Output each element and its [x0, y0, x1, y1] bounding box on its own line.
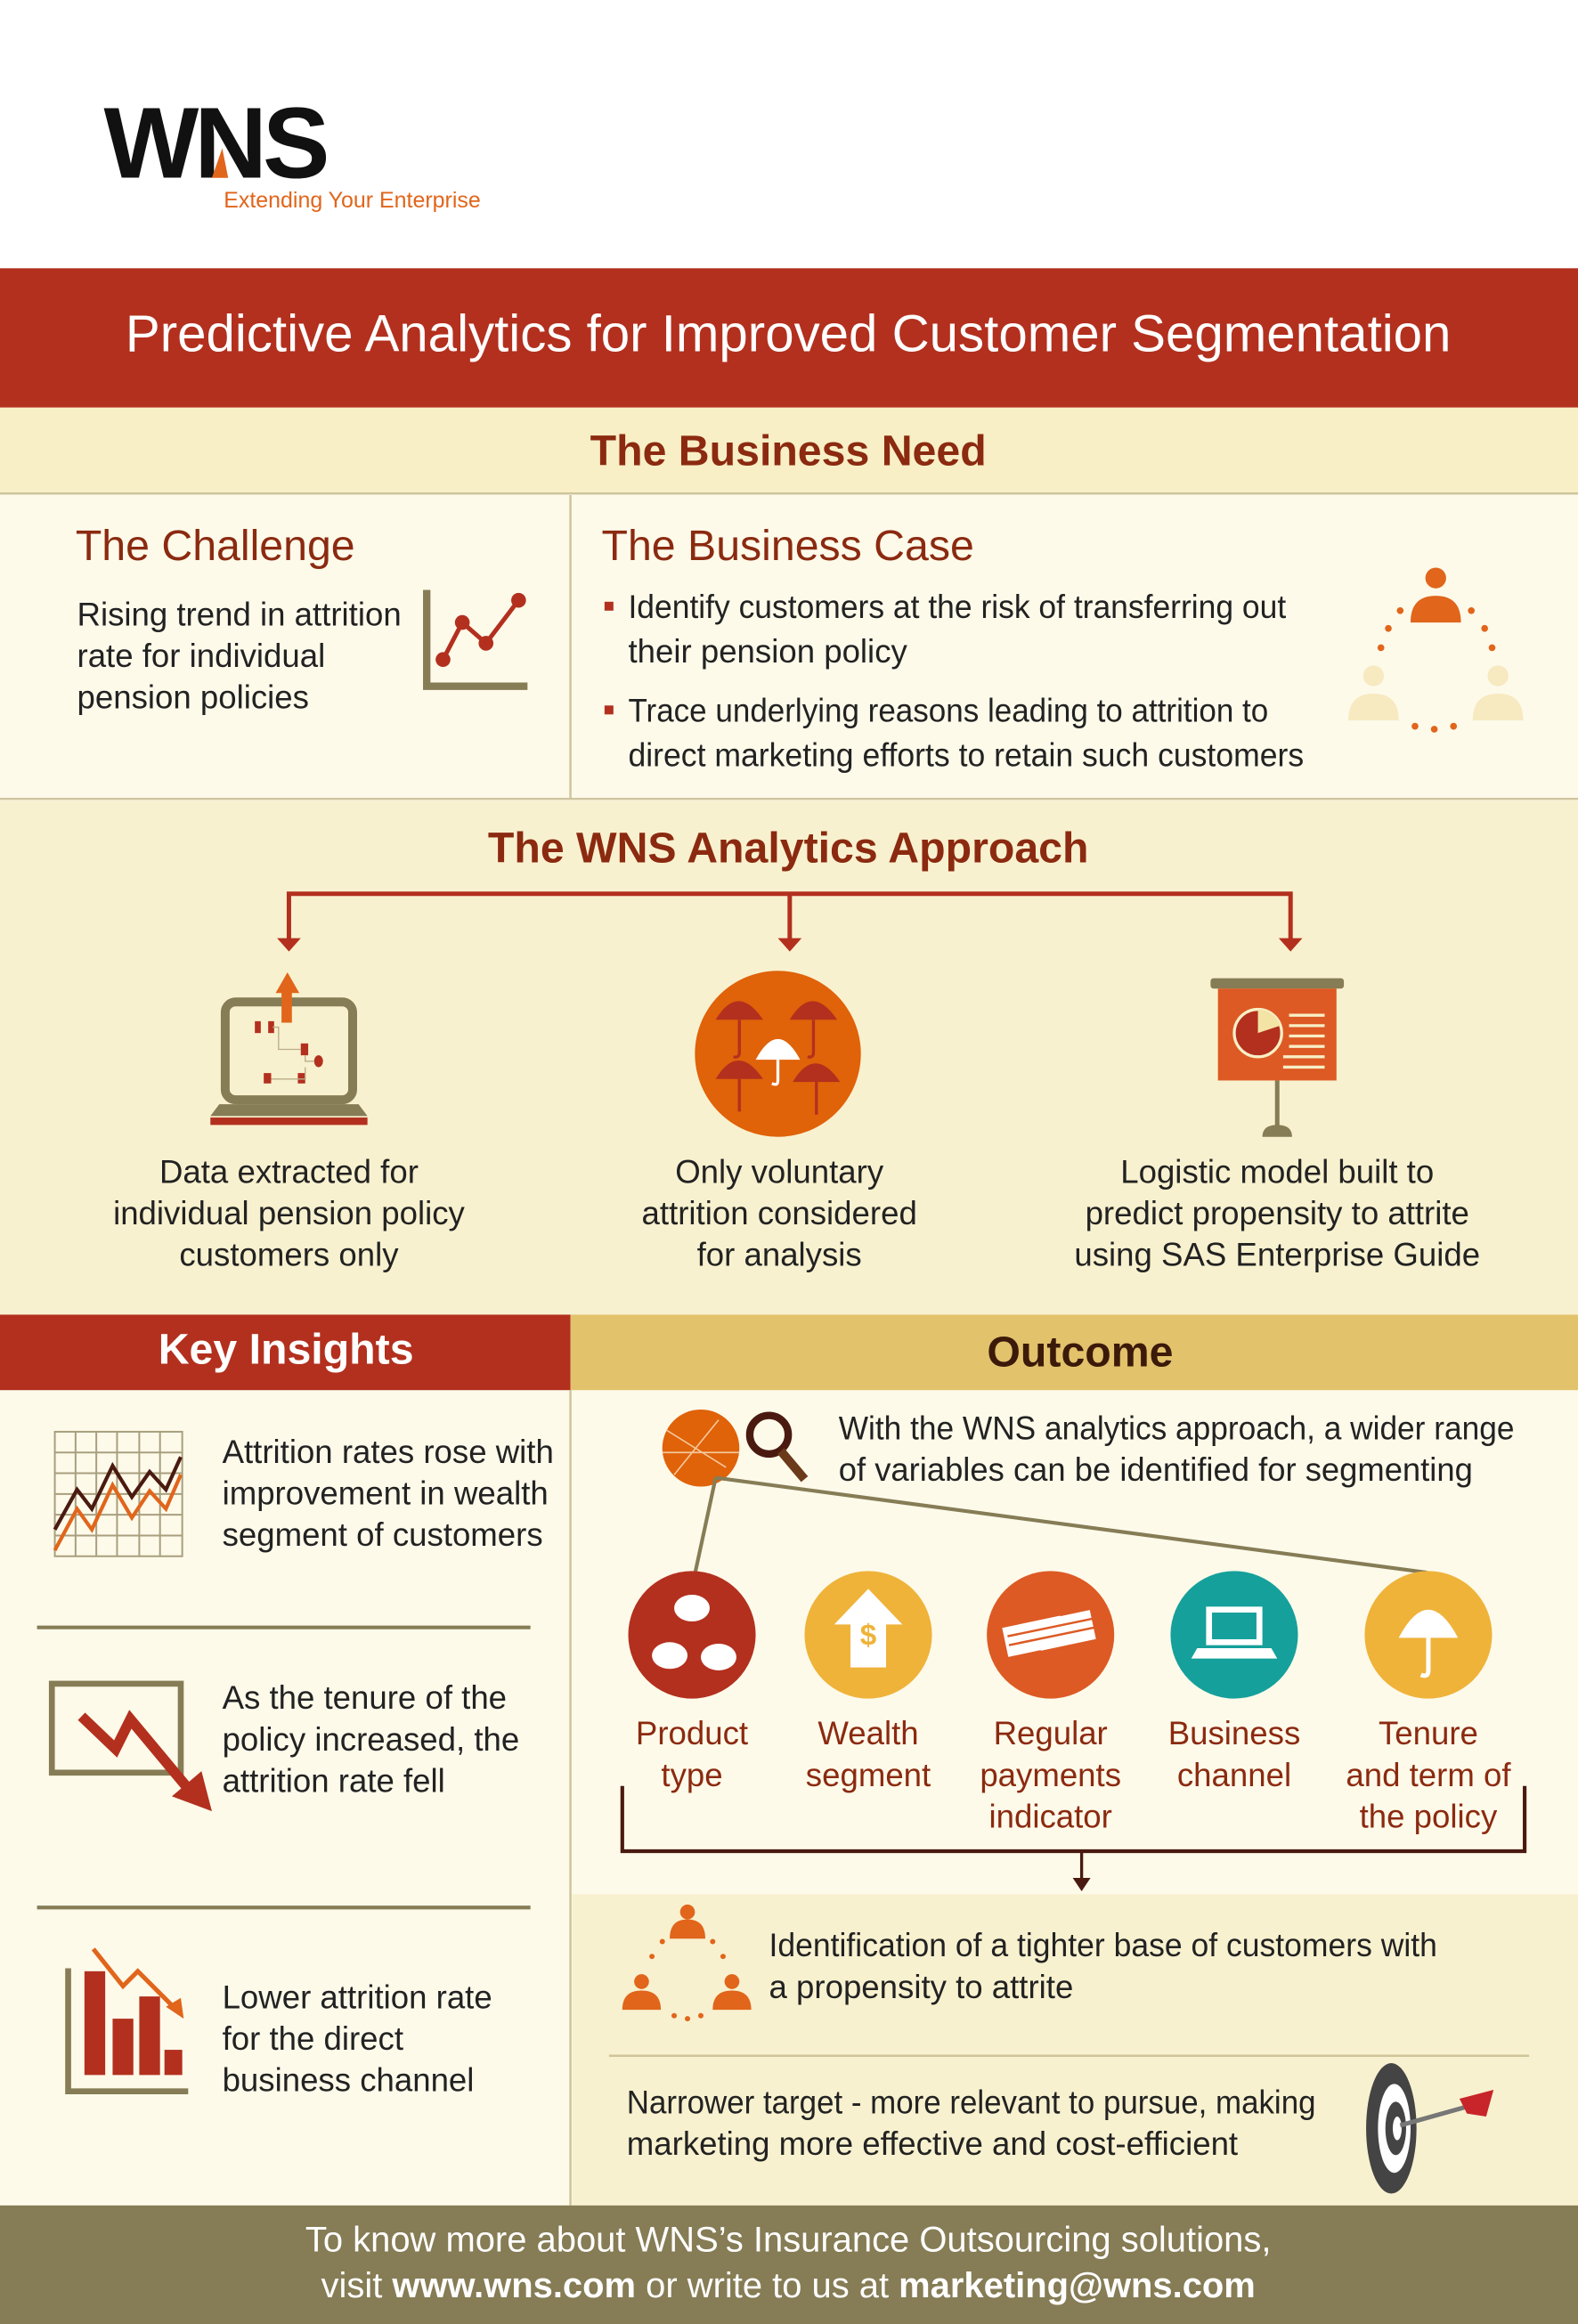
panel: outcome: the policy [1360, 1798, 1498, 1834]
panel: approach: for analysis [697, 1237, 862, 1273]
connector lines [695, 1478, 1427, 1574]
panel: business case [571, 495, 1578, 799]
panel: approach: using SAS Enterprise Guide [1074, 1237, 1480, 1273]
footer [0, 2206, 1578, 2324]
panel: business case: direct marketing efforts to retain such customers [628, 737, 1304, 774]
icon: payments [987, 1571, 1114, 1699]
panel: outcome: indicator [988, 1798, 1112, 1834]
panel: outcome [572, 1390, 1578, 2206]
panel: business case: their pension policy [628, 633, 907, 670]
panel: outcome: Product [636, 1715, 748, 1751]
icon: business channel [1170, 1571, 1298, 1699]
panel: approach: Logistic model built to [1120, 1153, 1434, 1190]
icon: umbrellas circle [695, 971, 861, 1137]
panel: business case: Identify customers at the risk of transferring out [628, 589, 1286, 625]
panel: outcome: type [661, 1757, 723, 1793]
icon: globe magnifier [663, 1410, 804, 1487]
panel: key insights: improvement in wealth [223, 1475, 549, 1512]
icon: bar chart down [69, 1949, 188, 2092]
panel: approach: individual pension policy [113, 1195, 466, 1231]
logo: Extending Your Enterprise [224, 188, 481, 213]
panel: outcome: marketing more effective and cost-efficient [627, 2125, 1238, 2162]
panel: approach: Data extracted for [159, 1153, 419, 1190]
logo: WNS [103, 87, 327, 199]
panel: challenge: The Challenge [76, 522, 355, 570]
panel: key insights: policy increased, the [223, 1721, 519, 1758]
business need header [0, 408, 1578, 493]
panel: outcome: Tenure [1379, 1715, 1478, 1751]
icon: rising chart [427, 589, 527, 687]
panel: outcome: segment [806, 1757, 931, 1793]
panel: outcome: channel [1177, 1757, 1291, 1793]
panel: approach: The WNS Analytics Approach [488, 825, 1088, 873]
panel: key insights: attrition rate fell [223, 1762, 445, 1799]
key insights header: Key Insights [159, 1325, 414, 1373]
icon: laptop [210, 972, 368, 1125]
panel: challenge: Rising trend in attrition [77, 596, 402, 632]
footer: visit www.wns.com or write to us at marketing@wns.com [321, 2266, 1256, 2305]
key insights header [0, 1314, 571, 1390]
panel: challenge: pension policies [77, 679, 309, 716]
panel: key insights: Attrition rates rose with [223, 1434, 554, 1470]
icon: people group [622, 1905, 752, 2021]
panel: outcome: and term of [1346, 1757, 1511, 1793]
icon: wealth [804, 1571, 932, 1699]
panel: approach: attrition considered [642, 1195, 917, 1231]
icon: falling arrow [52, 1684, 212, 1811]
panel: approach: predict propensity to attrite [1086, 1195, 1469, 1231]
panel: outcome: payments [980, 1757, 1121, 1793]
icon: wealth: $ [860, 1620, 877, 1653]
panel: challenge: rate for individual [77, 638, 325, 674]
panel: challenge [0, 495, 571, 799]
panel: key insights: segment of customers [223, 1516, 543, 1553]
icon: product type [628, 1571, 756, 1699]
logo [103, 87, 481, 213]
bracket arrow [622, 1786, 1525, 1891]
panel: outcome: Business [1168, 1715, 1300, 1751]
panel: approach: customers only [179, 1237, 399, 1273]
icon: people circle [1348, 568, 1523, 733]
panel: key insights: Lower attrition rate [223, 1979, 492, 2015]
panel: business case: The Business Case [602, 522, 974, 570]
panel: approach: Only voluntary [675, 1153, 884, 1190]
panel: outcome: of variables can be identified for segmenting [839, 1451, 1473, 1488]
title band [0, 268, 1578, 408]
panel: outcome: Regular [994, 1715, 1108, 1751]
icon: grid chart [55, 1432, 183, 1556]
panel: key insights: for the direct [223, 2020, 403, 2057]
panel: key insights: As the tenure of the [223, 1679, 507, 1716]
panel: outcome: a propensity to attrite [769, 1969, 1073, 2005]
footer: To know more about WNS’s Insurance Outsourcing solutions, [305, 2220, 1271, 2259]
icon: tenure umbrella [1364, 1571, 1492, 1699]
panel: outcome: Wealth [817, 1715, 919, 1751]
panel: key insights: business channel [223, 2062, 474, 2099]
icon: dart target [1366, 2063, 1493, 2194]
panel: outcome: Identification of a tighter base of customers with [769, 1927, 1437, 1963]
business need header: The Business Need [590, 427, 987, 475]
panel: outcome: Narrower target - more relevant to pursue, making [627, 2084, 1315, 2121]
panel: key insights [0, 1390, 571, 2206]
outcome header: Outcome [987, 1329, 1173, 1377]
panel: business case: Trace underlying reasons leading to attrition to [628, 693, 1268, 729]
title band: Predictive Analytics for Improved Customer Segmentation [126, 305, 1451, 362]
panel: approach [0, 799, 1578, 1314]
panel: outcome: With the WNS analytics approach, a wider range [839, 1410, 1514, 1446]
arrows: branching [277, 894, 1303, 952]
icon: presentation board [1210, 979, 1344, 1137]
outcome header [571, 1314, 1578, 1390]
